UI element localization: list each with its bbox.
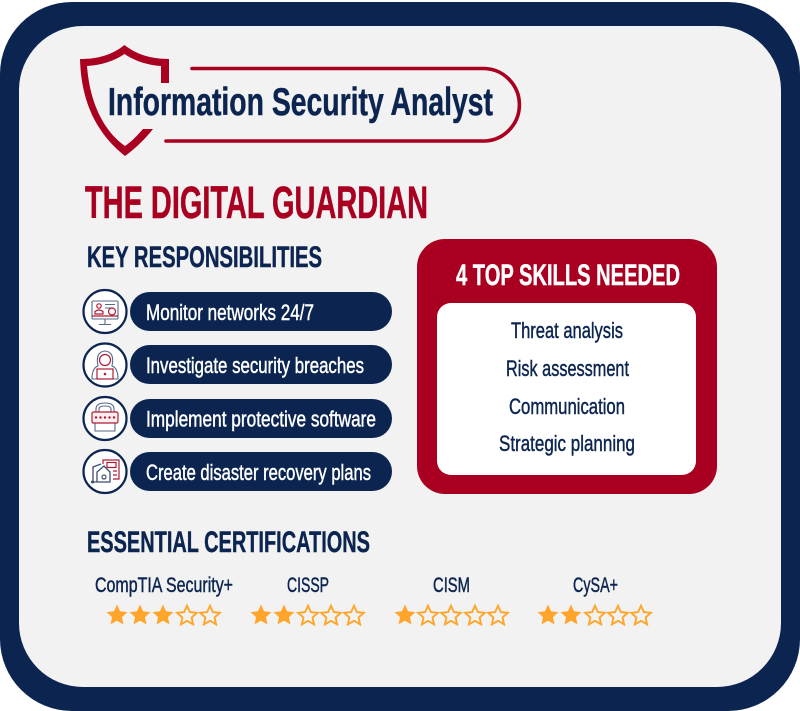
heading: the digital guardian: THE DIGITAL GUARDIAN [85,177,428,228]
skills list: Strategic planning [499,431,635,456]
skills list [437,303,696,475]
skills list: Risk assessment [506,356,629,381]
icon: password padlock [84,397,126,440]
pill: implement software: Implement protective software [146,406,376,432]
pill: investigate breaches [130,345,392,384]
pill: investigate breaches: Investigate security breaches [146,353,364,378]
heading: essential certifications: ESSENTIAL CERTIFICATIONS [87,526,370,559]
skills heading: 4 TOP SKILLS NEEDED [456,259,680,292]
panel: certifications [95,574,651,624]
icon: home network and recovery document [84,450,126,493]
pill: monitor networks [130,292,392,331]
certification: CompTIA Security+ [95,574,233,624]
certification: CISSP: CISSP [287,574,329,597]
pill: disaster recovery [130,452,392,491]
certification: CySA+ [538,574,651,624]
pill: disaster recovery: Create disaster recovery plans [146,460,371,485]
certification: CISM [395,574,508,624]
icon: shield outline [80,45,169,156]
heading: key responsibilities: KEY RESPONSIBILITIES [87,241,322,274]
certification: CySA+: CySA+ [573,574,618,597]
pill: implement software [130,399,392,438]
capsule outline [166,68,519,141]
icon: hooded hacker with laptop [84,344,126,386]
panel: key responsibilities list [84,290,392,493]
skills list: Threat analysis [511,318,623,343]
certification: CISM: CISM [433,574,470,597]
panel: top skills [417,239,717,494]
title text: Information Security Analyst [108,81,493,124]
certification: CompTIA Security+: CompTIA Security+ [95,574,233,597]
pill: monitor networks: Monitor networks 24/7 [146,300,314,325]
title banner [80,45,519,156]
skills list: Communication [509,394,625,419]
icon: monitor with user profile [84,290,126,333]
certification: CISSP [251,574,364,624]
